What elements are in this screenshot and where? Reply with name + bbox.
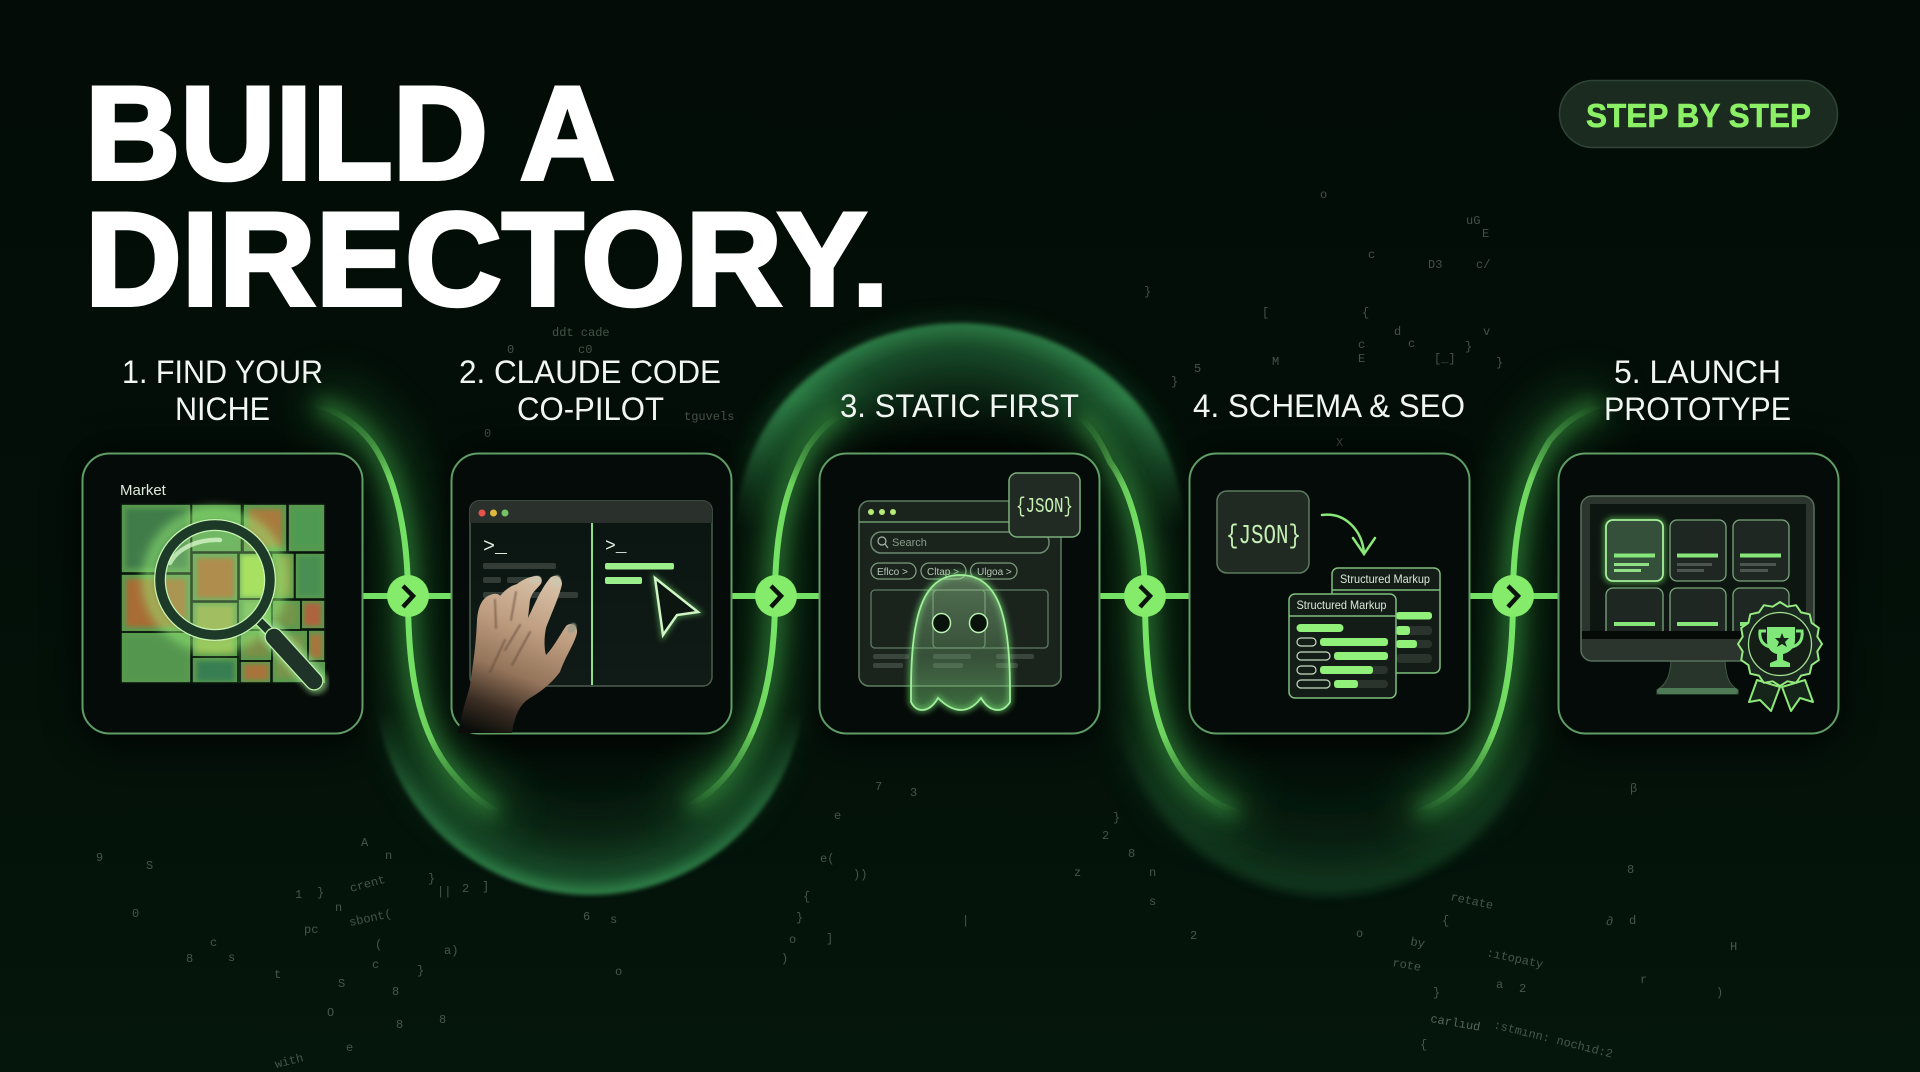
- scattered code characters: S: [146, 859, 153, 873]
- scattered code characters: r: [1640, 973, 1647, 987]
- scattered code characters: }: [1171, 375, 1178, 389]
- glow lobe: upper centre: [735, 323, 1185, 540]
- scattered code characters: :ıtopaty: [1485, 946, 1544, 972]
- scattered code characters: 7: [875, 780, 882, 794]
- panel: step 1 find your niche: [82, 454, 362, 734]
- scattered code characters: uG: [1466, 214, 1480, 228]
- scattered code characters: c0: [578, 343, 592, 357]
- browser window: Search: [892, 537, 927, 549]
- connectors between cards: [362, 593, 1559, 599]
- scattered code characters: A: [361, 836, 369, 850]
- arrow node 4: [1492, 575, 1534, 617]
- title: DIRECTORY.: [85, 186, 889, 334]
- scattered code characters: c/: [1476, 258, 1490, 272]
- scattered code characters: c: [1408, 337, 1415, 351]
- scattered code characters: }: [1433, 986, 1440, 1000]
- scattered code characters: 0: [507, 343, 514, 357]
- scattered code characters: 1: [295, 888, 302, 902]
- scattered code characters: a: [1496, 978, 1503, 992]
- panel: back structured markup: [1332, 568, 1440, 673]
- scattered code characters: ): [781, 952, 788, 966]
- label: market: Market: [120, 482, 167, 499]
- wide glow along the flow curve: [317, 405, 1600, 812]
- icon: magnifying glass: [149, 514, 316, 682]
- arrow node 3: [1124, 575, 1166, 617]
- step labels: [122, 354, 1791, 427]
- scattered code characters: E: [1482, 227, 1489, 241]
- scattered code characters: [96, 188, 1737, 1072]
- scattered code characters: 2: [1102, 829, 1109, 843]
- scattered code characters: t: [274, 968, 281, 982]
- scattered code characters: pc: [304, 923, 318, 937]
- scattered code characters: c: [372, 958, 379, 972]
- scattered code characters: 6: [583, 910, 590, 924]
- scattered code characters: d: [1394, 325, 1401, 339]
- step labels: 1. FIND YOUR: [122, 354, 323, 390]
- scattered code characters: E: [1358, 352, 1365, 366]
- scattered code characters: 8: [392, 985, 399, 999]
- scattered code characters: o: [615, 965, 622, 979]
- scattered code characters: [: [1262, 306, 1269, 320]
- scattered code characters: 8: [439, 1013, 446, 1027]
- scattered code characters: }: [317, 886, 324, 900]
- scattered code characters: n: [1149, 866, 1156, 880]
- scattered code characters: v: [1483, 325, 1490, 339]
- scattered code characters: O: [327, 1006, 334, 1020]
- scattered code characters: 3: [910, 786, 917, 800]
- scattered code characters: {: [803, 890, 810, 904]
- panel: front structured markup: [1289, 594, 1396, 698]
- scattered code characters: s: [228, 951, 235, 965]
- scattered code characters: }: [428, 872, 435, 886]
- arrow node 1: [387, 575, 429, 617]
- flow curve: [317, 405, 1600, 812]
- scattered code characters: 2: [462, 882, 469, 896]
- curved arrow: [1322, 515, 1375, 554]
- scattered code characters: }: [1144, 285, 1151, 299]
- scattered code characters: {: [1420, 1038, 1427, 1052]
- icon: json chip: {JSON}: [1016, 496, 1073, 519]
- scattered code characters: 2: [1190, 929, 1197, 943]
- scattered code characters: ): [1716, 986, 1723, 1000]
- browser window: [859, 501, 1061, 686]
- terminal window: [470, 501, 712, 686]
- scattered code characters: 8: [396, 1018, 403, 1032]
- step labels: CO-PILOT: [517, 391, 664, 427]
- scattered code characters: z: [1074, 866, 1081, 880]
- scattered code characters: }: [417, 964, 424, 978]
- monitor: [1581, 496, 1814, 694]
- icon: json box: [1217, 491, 1309, 573]
- browser window: Eflco >: [877, 567, 908, 578]
- scattered code characters: s: [1149, 895, 1156, 909]
- scattered code characters: }: [1113, 811, 1120, 825]
- scattered code characters: e: [346, 1041, 353, 1055]
- step labels: 2. CLAUDE CODE: [459, 354, 721, 390]
- scattered code characters: e: [834, 809, 841, 823]
- badge: step by step: STEP BY STEP: [1586, 97, 1811, 134]
- scattered code characters: crent: [348, 873, 387, 896]
- scattered code characters: d: [1629, 914, 1636, 928]
- scattered code characters: 0: [132, 907, 139, 921]
- scattered code characters: sbont(: [348, 907, 393, 930]
- scattered code characters: rote: [1391, 956, 1422, 975]
- tight glow along the flow curve: [317, 405, 1600, 812]
- step labels: PROTOTYPE: [1604, 391, 1791, 427]
- icon: json box: {JSON}: [1226, 522, 1301, 552]
- step labels: 3. STATIC FIRST: [840, 388, 1079, 424]
- scattered code characters: }: [796, 911, 803, 925]
- scattered code characters: o: [789, 933, 796, 947]
- terminal window: >_: [605, 537, 627, 557]
- scattered code characters: }: [1465, 340, 1472, 354]
- scattered code characters: o: [1320, 188, 1327, 202]
- scattered code characters: :stmınn: nochıd:2: [1492, 1018, 1614, 1061]
- step labels: NICHE: [175, 391, 270, 427]
- scattered code characters: ]: [482, 880, 489, 894]
- scattered code characters: S: [338, 977, 345, 991]
- scattered code characters: X: [1336, 436, 1343, 450]
- scattered code characters: s: [610, 913, 617, 927]
- scattered code characters: c: [1368, 248, 1375, 262]
- scattered code characters: {: [1362, 306, 1369, 320]
- treemap: [121, 504, 325, 683]
- icon: hand: [458, 574, 578, 733]
- panel: front structured markup: Structured Markup: [1296, 598, 1387, 612]
- icon: ghost: [911, 575, 1010, 710]
- browser window: Ulgoa >: [977, 567, 1012, 578]
- card shadows: [82, 440, 1838, 748]
- arrow node 2: [755, 575, 797, 617]
- scattered code characters: ]: [826, 932, 833, 946]
- scattered code characters: {: [1442, 914, 1449, 928]
- scattered code characters: 2: [1519, 982, 1526, 996]
- panel: step 3 static first: [820, 454, 1100, 734]
- scattered code characters: }: [1496, 356, 1503, 370]
- scattered code characters: M: [1272, 355, 1279, 369]
- panel: step 5 launch prototype: [1558, 454, 1838, 734]
- scattered code characters: [_]: [1434, 352, 1456, 366]
- title: [85, 60, 889, 334]
- scattered code characters: 8: [1627, 863, 1634, 877]
- scattered code characters: H: [1730, 940, 1737, 954]
- scattered code characters: with: [274, 1051, 305, 1072]
- browser window: Cltap >: [927, 567, 959, 578]
- scattered code characters: by: [1409, 935, 1426, 951]
- panel: step 4 schema and seo: [1190, 454, 1470, 734]
- icon: cursor arrow: [655, 578, 698, 635]
- scattered code characters: n: [335, 901, 342, 915]
- scattered code characters: carlıud: [1429, 1012, 1481, 1035]
- terminal window: >_: [483, 536, 508, 559]
- scattered code characters: 8: [186, 952, 193, 966]
- scattered code characters: ∂: [1606, 915, 1613, 929]
- step labels: 5. LAUNCH: [1614, 354, 1781, 390]
- scattered code characters: ||: [437, 885, 451, 899]
- step labels: 4. SCHEMA & SEO: [1193, 388, 1465, 424]
- icon: award badge: [1738, 602, 1822, 711]
- scattered code characters: retate: [1449, 890, 1494, 913]
- glow lobe: lower right: [1130, 744, 1529, 898]
- scattered code characters: 5: [1194, 362, 1201, 376]
- icon: json chip: [1009, 473, 1080, 537]
- scattered code characters: a): [444, 944, 458, 958]
- panel: back structured markup: Structured Markup: [1340, 572, 1430, 586]
- scattered code characters: 0: [484, 427, 491, 441]
- scattered code characters: (: [375, 938, 382, 952]
- scattered code characters: D3: [1428, 258, 1442, 272]
- scattered code characters: ddt cade: [552, 326, 610, 340]
- scattered code characters: 8: [1128, 847, 1135, 861]
- glow lobe: lower left: [381, 720, 799, 898]
- title: BUILD A: [85, 60, 615, 208]
- scattered code characters: e(: [820, 852, 834, 866]
- scattered code characters: c: [210, 936, 217, 950]
- scattered code characters: 9: [96, 851, 103, 865]
- scattered code characters: β: [1630, 782, 1637, 796]
- scattered code characters: tguvels: [684, 410, 734, 424]
- scattered code characters: c: [1358, 338, 1365, 352]
- panel: step 2 claude code co-pilot: [452, 454, 732, 734]
- scattered code characters: )): [853, 868, 867, 882]
- scattered code characters: n: [385, 849, 392, 863]
- badge: step by step: [1560, 80, 1838, 148]
- scattered code characters: o: [1356, 927, 1363, 941]
- scattered code characters: |: [962, 914, 969, 928]
